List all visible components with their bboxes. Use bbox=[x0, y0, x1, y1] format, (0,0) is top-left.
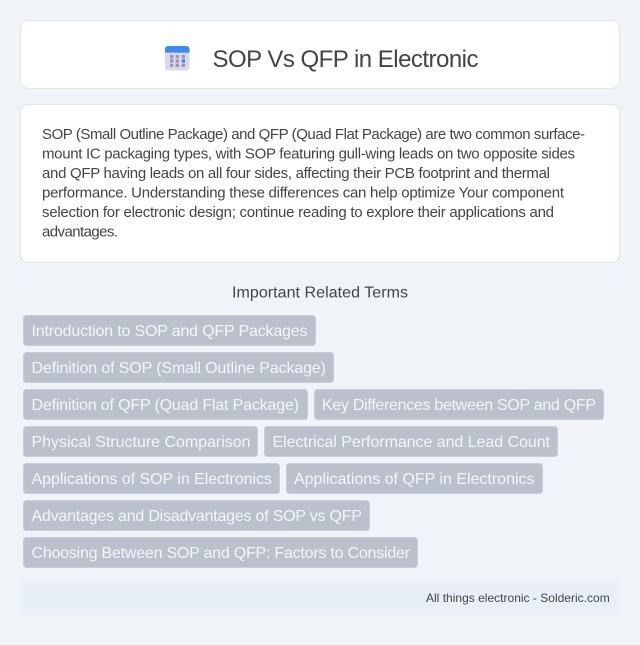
tag bbox=[264, 426, 558, 456]
tag bbox=[314, 390, 604, 420]
tag: Definition of QFP (Quad Flat Package) bbox=[32, 397, 299, 414]
panel: description: selection for electronic design; continue reading to explore their applications and bbox=[42, 204, 554, 221]
panel: description: and QFP having leads on all four sides, affecting their PCB footprint and thermal bbox=[42, 165, 550, 182]
tag: Choosing Between SOP and QFP: Factors to Consider bbox=[32, 545, 411, 562]
panel: description: performance. Understanding these differences can help optimize Your component bbox=[42, 184, 565, 202]
tag bbox=[24, 500, 370, 530]
tag: Key Differences between SOP and QFP bbox=[322, 397, 596, 414]
tag bbox=[24, 538, 418, 568]
panel: description: advantages. bbox=[42, 224, 118, 240]
tag: Physical Structure Comparison bbox=[32, 434, 250, 451]
tag bbox=[24, 316, 316, 346]
tag bbox=[24, 352, 334, 382]
tag: Introduction to SOP and QFP Packages bbox=[32, 323, 308, 340]
panel: description: mount IC packaging types, with SOP featuring gull-wing leads on two opposite sides bbox=[42, 146, 575, 162]
tag bbox=[24, 464, 280, 494]
footer bbox=[20, 581, 620, 615]
tag: Advantages and Disadvantages of SOP vs QFP bbox=[32, 508, 362, 525]
tag bbox=[24, 390, 308, 420]
tag: Definition of SOP (Small Outline Package) bbox=[32, 360, 326, 377]
icon: calendar bbox=[165, 46, 190, 70]
tag: Applications of SOP in Electronics bbox=[32, 471, 272, 488]
panel: description: SOP (Small Outline Package) and QFP (Quad Flat Package) are two common surface- bbox=[42, 126, 585, 143]
heading: important related terms: Important Related Terms bbox=[232, 284, 408, 302]
tag bbox=[24, 426, 258, 456]
header card bbox=[20, 20, 620, 88]
footer text: All things electronic - Solderic.com bbox=[426, 591, 610, 605]
panel: related term tags bbox=[24, 316, 604, 568]
tag: Applications of QFP in Electronics bbox=[294, 471, 534, 488]
tag bbox=[286, 464, 542, 494]
title: SOP Vs QFP in Electronic bbox=[212, 46, 478, 73]
tag: Electrical Performance and Lead Count bbox=[272, 434, 551, 451]
panel: description bbox=[20, 104, 620, 262]
